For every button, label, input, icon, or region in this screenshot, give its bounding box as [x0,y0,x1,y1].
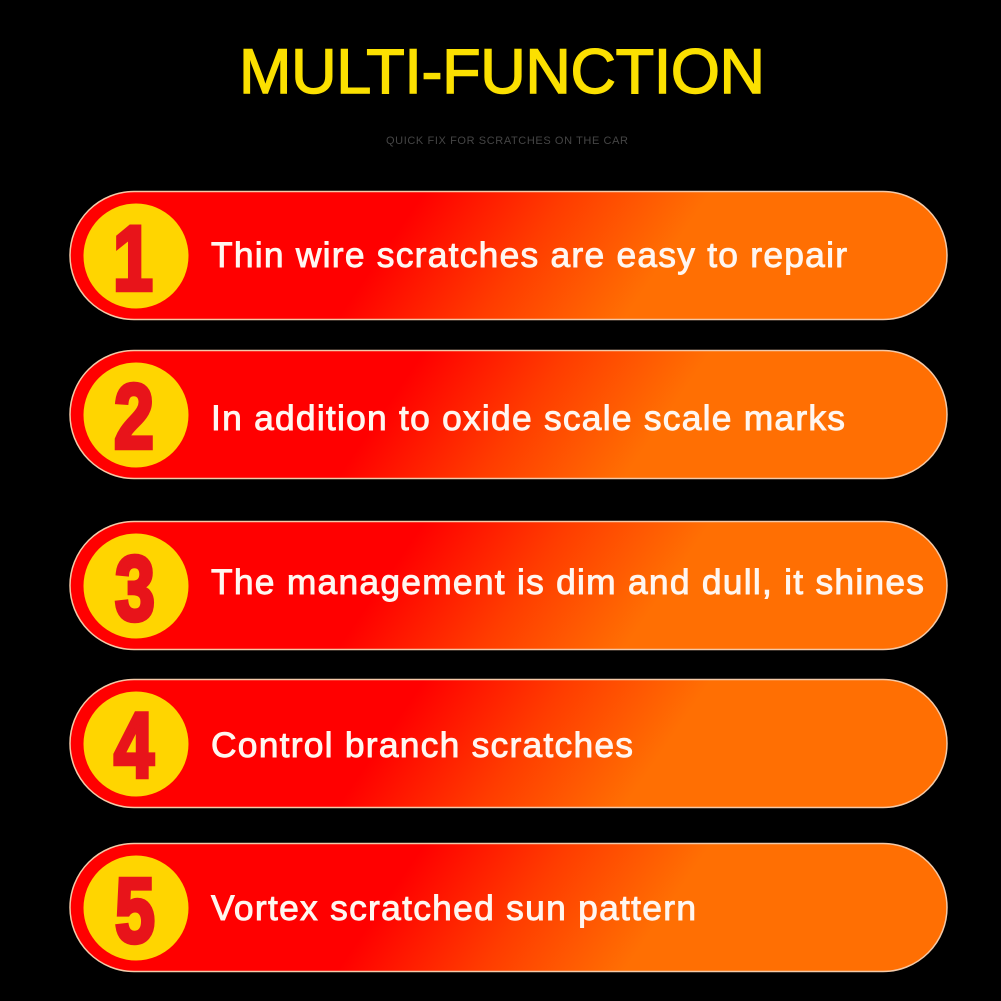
text 5: Vortex scratched sun pattern [211,888,696,928]
pill 1 [70,192,947,320]
pill 4 [70,680,947,808]
pill 2 [70,350,947,478]
panel: item 4 [70,680,947,808]
panel: item 3 [70,522,947,650]
text 2: In addition to oxide scale scale marks [211,398,845,438]
panel: item 2 [70,350,947,478]
subtitle: QUICK FIX FOR SCRATCHES ON THE CAR [386,135,628,147]
badge 2 [84,362,188,468]
number 2: 2 [114,365,154,468]
badge 3 [84,534,188,638]
title: MULTI-FUNCTION [239,37,765,107]
pill 5 [70,844,947,972]
badge 1 [84,204,188,308]
badge 4 [84,692,188,796]
number 5: 5 [115,859,155,962]
pill 3 [70,522,947,650]
number 3: 3 [115,537,155,640]
text 3: The management is dim and dull, it shines [211,562,924,602]
panel: item 5 [70,844,947,972]
text 1: Thin wire scratches are easy to repair [211,235,847,275]
number 1: 1 [113,207,153,310]
text 4: Control branch scratches [211,725,633,765]
badge 5 [84,856,188,960]
panel: item 1 [70,192,947,320]
number 4: 4 [114,694,154,797]
